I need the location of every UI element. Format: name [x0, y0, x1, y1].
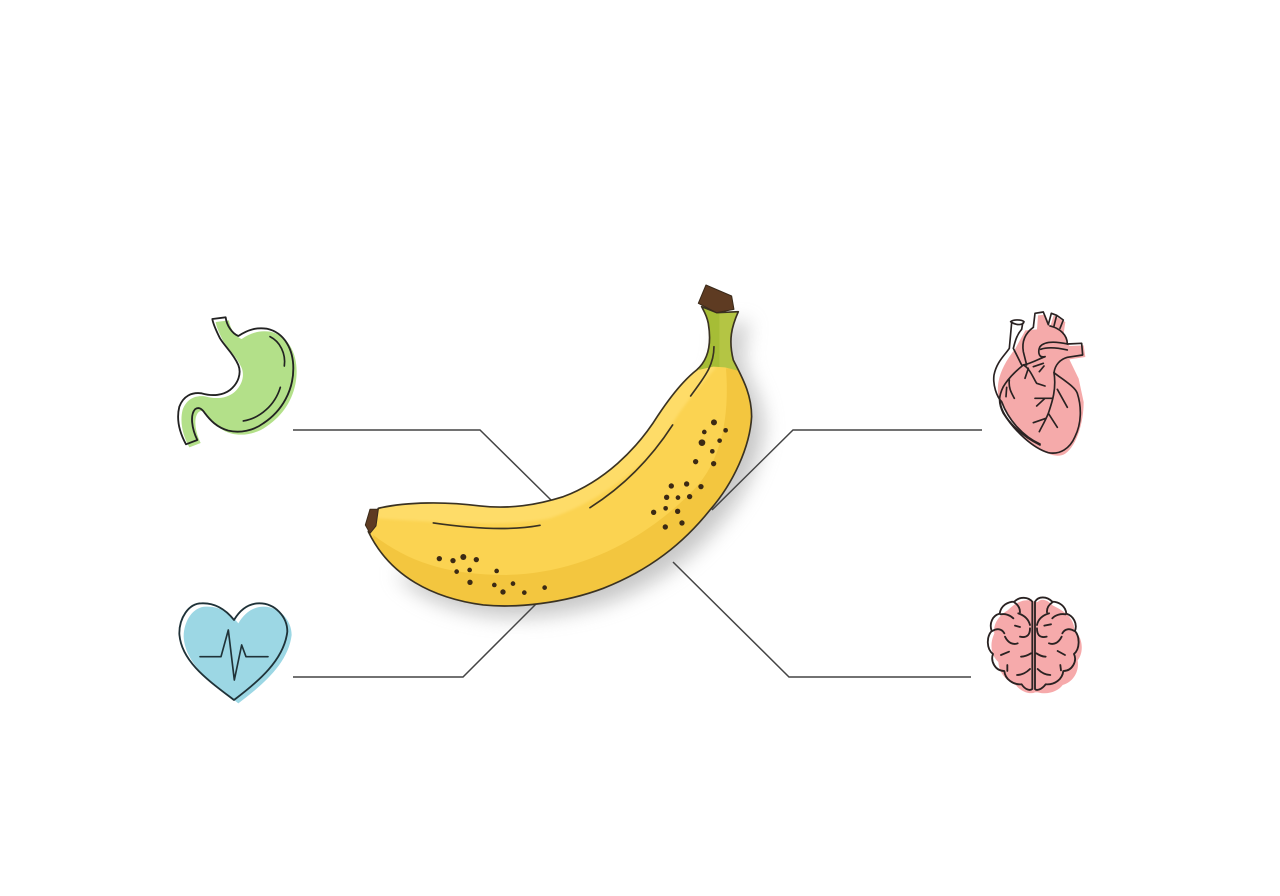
ridge lines: [433, 347, 714, 528]
banana body fill: [370, 308, 751, 606]
banana spots: [437, 419, 728, 595]
stem cap: [698, 285, 734, 313]
icon: stomach: [178, 317, 297, 447]
icon: heart with pulse: [179, 603, 292, 703]
connector: stomach to banana: [293, 430, 551, 500]
infographic canvas: [177, 284, 1086, 704]
icon: anatomical heart: [994, 312, 1085, 456]
banana illustration: [364, 284, 752, 607]
pulse line: [200, 630, 268, 680]
connector: anatomical heart to banana: [712, 430, 982, 510]
banana outline: [368, 307, 752, 606]
stomach inner lines: [243, 337, 285, 421]
tip cap: [365, 509, 378, 533]
brain outline: [988, 597, 1079, 690]
icon: brain: [988, 597, 1082, 693]
banana drop shadow: [395, 323, 764, 617]
connector: brain to banana: [673, 562, 971, 677]
connector: heart health to banana: [293, 604, 536, 677]
anatomical heart outline: [994, 312, 1083, 453]
